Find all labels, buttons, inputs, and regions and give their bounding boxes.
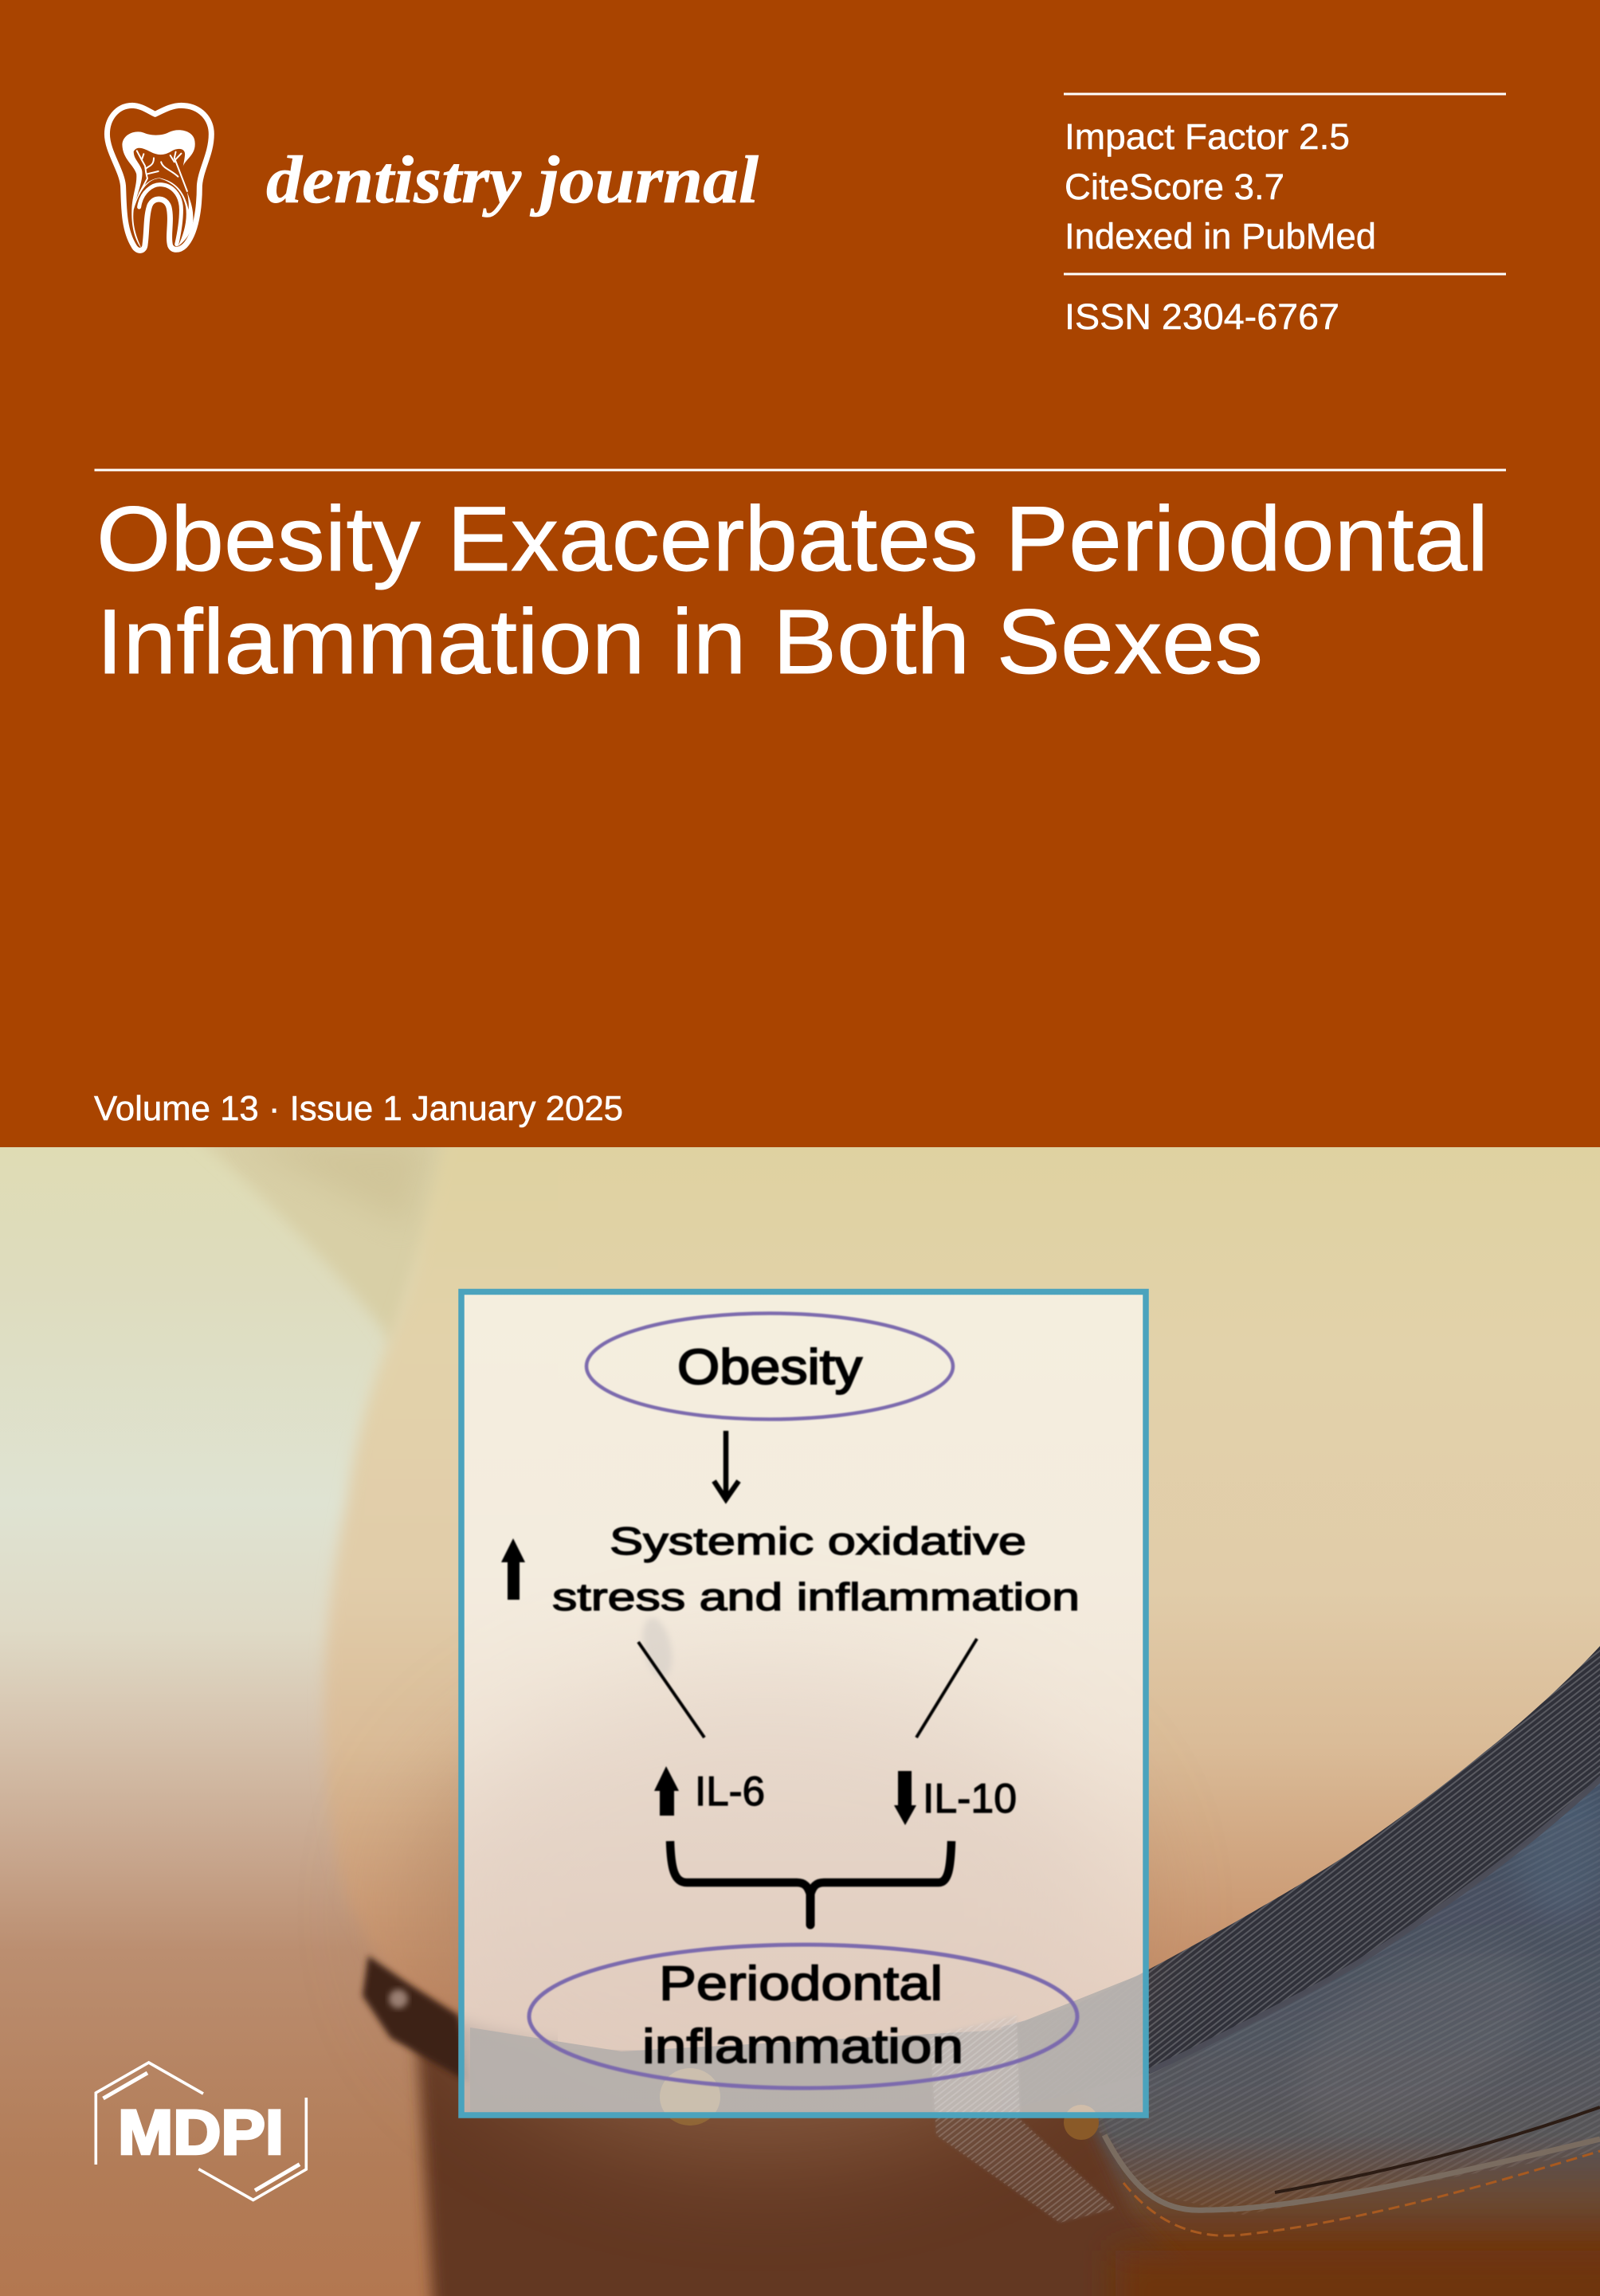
waistband seam (1149, 1770, 1600, 2071)
body left blurred (324, 1131, 876, 2051)
panel: obesity pathway diagram (461, 1291, 1146, 2115)
waistband (1016, 1646, 1600, 2073)
il-10 label: IL-10 (923, 1776, 1017, 1822)
diagram content (501, 1313, 1080, 2088)
title line 1: Obesity Exacerbates Periodontal (96, 488, 1488, 590)
stress label line 2: stress and inflammation (552, 1577, 1080, 1619)
belt (363, 1956, 470, 2083)
obesity label: Obesity (677, 1340, 862, 1395)
arm shadow (296, 1147, 416, 1209)
periodontal label: Periodontal (659, 1957, 943, 2010)
jeans button (1064, 2105, 1099, 2140)
panel background (461, 1291, 1146, 2115)
indexing: Indexed in PubMed (1065, 216, 1376, 257)
metrics block (1064, 92, 1506, 337)
jeans ghost under panel (470, 1972, 1147, 2115)
arrow: obesity to stress (714, 1431, 739, 1499)
hexagon upper stroke (96, 2063, 203, 2165)
brace stem (806, 1890, 814, 1925)
obesity ellipse (586, 1313, 953, 1420)
line to il-6 (638, 1642, 704, 1738)
impact factor: Impact Factor 2.5 (1065, 116, 1350, 157)
icon: tooth logo (107, 105, 211, 250)
inflammation label: inflammation (642, 2020, 963, 2073)
tooth nerve branches (137, 151, 187, 194)
brace (670, 1841, 951, 1894)
il-10 down arrow (894, 1771, 916, 1825)
panel border (461, 1292, 1146, 2115)
belly button (637, 1615, 677, 1680)
jeans blue highlight (1520, 1800, 1600, 1910)
hexagon lower inner stroke (255, 2165, 300, 2191)
pocket light edge (1104, 2135, 1600, 2210)
stress label line 1: Systemic oxidative (610, 1521, 1026, 1563)
journal name: dentistry journal (266, 143, 759, 217)
article title (94, 468, 1506, 693)
line to il-10 (916, 1639, 977, 1738)
body right (558, 1131, 1600, 2051)
left jeans (408, 2012, 1151, 2296)
issn: ISSN 2304-6767 (1065, 296, 1339, 337)
waistband twill texture (1136, 1649, 1600, 2068)
pocket dark seam (1275, 2107, 1600, 2192)
belt stud (389, 1989, 408, 2008)
fly flap (930, 2016, 1116, 2223)
il-6 label: IL-6 (695, 1769, 765, 1815)
orange header background (0, 0, 1600, 1147)
tooth pulp chamber (122, 130, 195, 249)
waistband button (660, 2068, 720, 2126)
title line 2: Inflammation in Both Sexes (96, 591, 1263, 693)
citescore: CiteScore 3.7 (1065, 167, 1284, 207)
periodontal inflammation ellipse (529, 1945, 1077, 2088)
photo background: torso and jeans (0, 1131, 1600, 2296)
jeans twill texture (1098, 1783, 1600, 2215)
tooth root arch (139, 185, 181, 245)
hexagon lower stroke (198, 2098, 306, 2200)
jeans base (1088, 1783, 1600, 2269)
volume and issue: Volume 13 · Issue 1 January 2025 (94, 1089, 623, 1128)
logo: MDPI (96, 2063, 306, 2200)
il-6 up arrow (654, 1766, 679, 1816)
hexagon upper inner stroke (104, 2073, 147, 2098)
jeans highlight (1347, 1969, 1514, 2041)
backdrop (0, 1147, 441, 2296)
logo wordmark: MDPI (118, 2097, 284, 2167)
pocket stitching (1124, 2151, 1600, 2235)
jeans bottom band (1116, 2251, 1600, 2296)
arm (210, 1147, 441, 1337)
top right corner backdrop (1562, 1147, 1600, 1195)
fly twill texture (930, 2016, 1116, 2223)
tooth outer outline (107, 105, 211, 250)
tooth inner chamber (134, 148, 189, 210)
belly shading behind panel (414, 1673, 1116, 2151)
increase arrow (501, 1538, 525, 1600)
